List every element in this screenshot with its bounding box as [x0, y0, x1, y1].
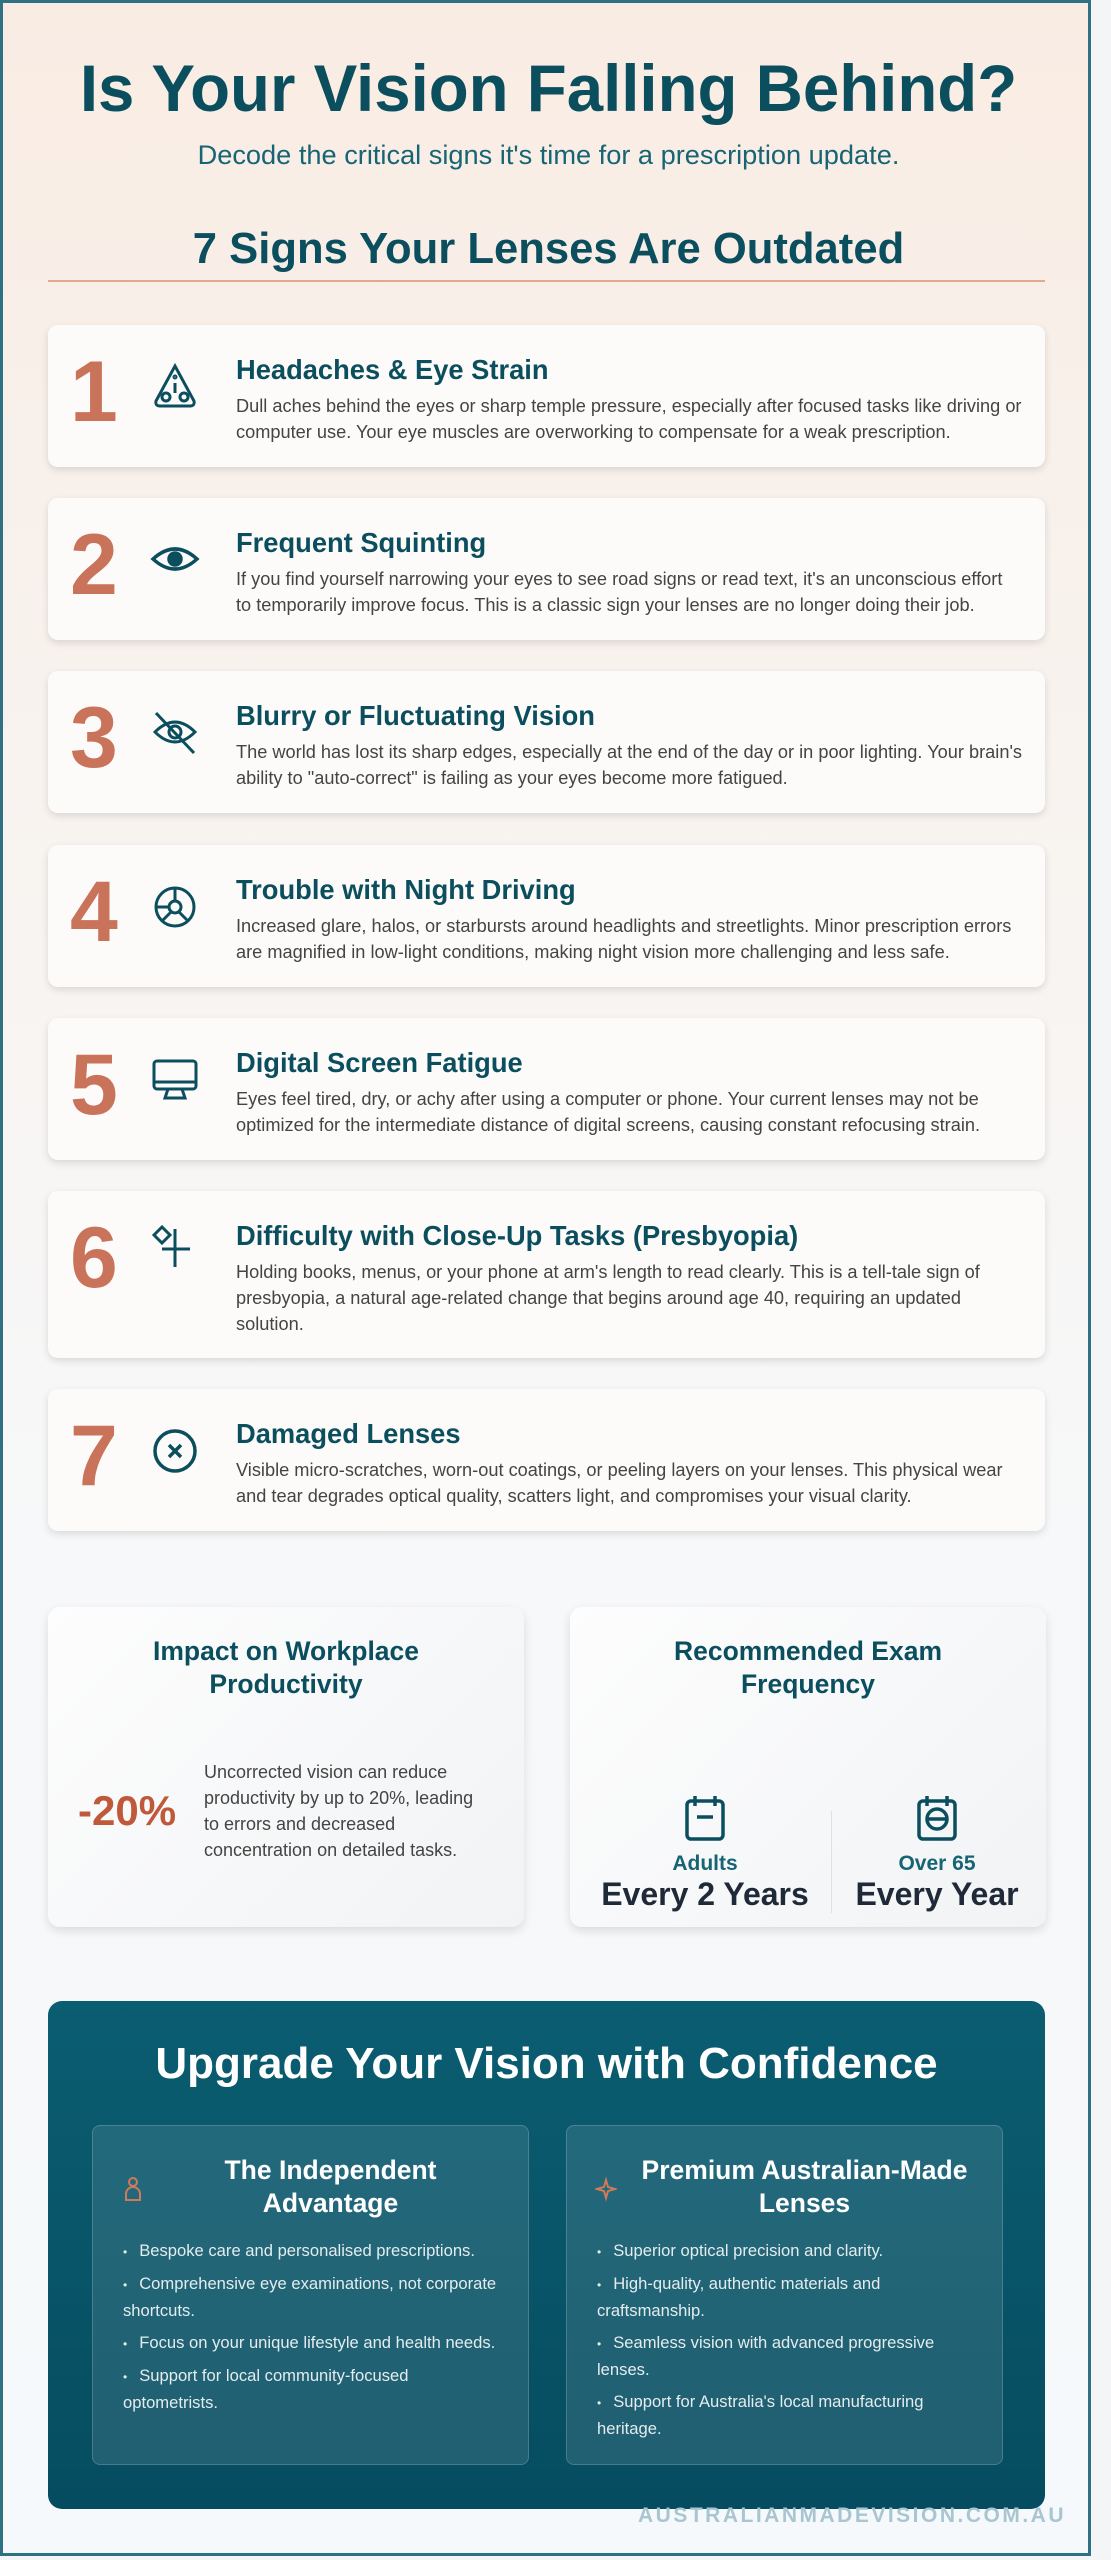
card 7: 7	[70, 1408, 118, 1504]
icon: monitor	[152, 1060, 198, 1100]
card 2: Frequent Squinting	[236, 527, 486, 558]
card: australian made: Support for Australia's local manufacturing heritage.	[597, 2392, 924, 2438]
over 65 column: Every Year	[855, 1876, 1019, 1912]
footer url: AUSTRALIANMADEVISION.COM.AU	[638, 2504, 1066, 2527]
card 6	[48, 1191, 1045, 1358]
panel: upgrade	[48, 2001, 1045, 2509]
card: australian made: Premium Australian-Made	[642, 2155, 967, 2185]
over 65 column: Over 65	[898, 1852, 976, 1875]
card 3: The world has lost its sharp edges, especially at the end of the day or in poor lighting. Your brain's ability to "auto-correct" is failing as your eyes become more fatigued.	[236, 742, 1022, 788]
card 4	[48, 845, 1045, 987]
card 4: 4	[70, 864, 118, 960]
card 7: Damaged Lenses	[236, 1418, 461, 1449]
section heading: 7 Signs Your Lenses Are Outdated	[193, 225, 904, 273]
panel: productivity: Impact on Workplace	[153, 1636, 419, 1666]
icon: warning head	[154, 363, 196, 408]
subtitle: Decode the critical signs it's time for a prescription update.	[198, 139, 899, 170]
card 5: Digital Screen Fatigue	[236, 1047, 523, 1078]
adults column: Adults	[672, 1852, 738, 1875]
adults column: Every 2 Years	[601, 1876, 809, 1912]
icon: damaged lens	[153, 1429, 197, 1473]
card 4: Increased glare, halos, or starbursts around headlights and streetlights. Minor prescription errors are magnified in low-light conditions, making night vision more challenging and less safe.	[236, 916, 1011, 962]
card 4: Trouble with Night Driving	[236, 874, 576, 905]
card: independent advantage: The Independent	[224, 2155, 436, 2185]
icon: night	[154, 886, 196, 928]
card: independent advantage: Focus on your unique lifestyle and health needs.	[139, 2333, 495, 2352]
panel: exam frequency	[570, 1607, 1046, 1927]
panel: productivity	[48, 1607, 524, 1927]
card 7	[48, 1389, 1045, 1531]
card 3	[48, 671, 1045, 813]
card: australian made: High-quality, authentic materials and craftsmanship.	[597, 2274, 880, 2320]
card 1	[48, 325, 1045, 467]
card 2: If you find yourself narrowing your eyes to see road signs or read text, it's an unconscious effort	[236, 569, 1002, 589]
card 1: 1	[70, 344, 118, 440]
upgrade heading: Upgrade Your Vision with Confidence	[155, 2039, 938, 2088]
icon: close-up	[152, 1225, 190, 1267]
adults column	[601, 1796, 809, 1912]
card 5: 5	[70, 1037, 118, 1133]
stat text: Uncorrected vision can reduce productivity by up to 20%, leading to errors and decreased concentration on detailed tasks.	[204, 1762, 473, 1860]
icon: eye	[150, 547, 200, 571]
card 5: Eyes feel tired, dry, or achy after using a computer or phone. Your current lenses may not be optimized for the intermediate distance of digital screens, causing constant refocusing strain.	[236, 1089, 980, 1135]
card: independent advantage	[92, 2125, 529, 2465]
icon: sparkle	[595, 2176, 617, 2202]
icon: person	[125, 2177, 141, 2201]
over 65 column	[855, 1796, 1019, 1912]
card: australian made: Seamless vision with advanced progressive lenses.	[597, 2333, 934, 2379]
panel: productivity: Productivity	[209, 1669, 363, 1699]
card 2	[48, 498, 1045, 640]
card 6: 6	[70, 1210, 118, 1306]
card 2: 2	[70, 517, 118, 613]
card: australian made: Lenses	[759, 2188, 850, 2218]
card 1: Dull aches behind the eyes or sharp temple pressure, especially after focused tasks like driving or computer use. Your eye muscles are overworking to compensate for a weak prescription.	[236, 396, 1022, 442]
card: australian made: Superior optical precision and clarity.	[613, 2241, 883, 2260]
card 2: to temporarily improve focus. This is a classic sign your lenses are no longer doing their job.	[236, 595, 975, 615]
card 7: Visible micro-scratches, worn-out coatings, or peeling layers on your lenses. This physical wear and tear degrades optical quality, scatters light, and compromises your visual clarity.	[236, 1460, 1003, 1506]
panel: exam frequency: Recommended Exam	[674, 1636, 942, 1666]
title: Is Your Vision Falling Behind?	[80, 52, 1017, 125]
card 3: 3	[70, 690, 118, 786]
card: independent advantage: Comprehensive eye examinations, not corporate shortcuts.	[123, 2274, 496, 2320]
card: independent advantage: Bespoke care and personalised prescriptions.	[139, 2241, 475, 2260]
card: independent advantage: Support for local community-focused optometrists.	[123, 2366, 409, 2412]
card: australian made	[566, 2125, 1003, 2465]
icon: eye off	[153, 712, 197, 754]
card 6: Holding books, menus, or your phone at arm's length to read clearly. This is a tell-tale sign of presbyopia, a natural age-related change that begins around age 40, requiring an updated solution.	[236, 1262, 980, 1334]
card: independent advantage: Advantage	[263, 2188, 398, 2218]
panel: exam frequency: Frequency	[741, 1669, 875, 1699]
card 3: Blurry or Fluctuating Vision	[236, 700, 595, 731]
card 5	[48, 1018, 1045, 1160]
stat: -20%	[78, 1787, 176, 1834]
card 6: Difficulty with Close-Up Tasks (Presbyopia)	[236, 1220, 798, 1251]
card 1: Headaches & Eye Strain	[236, 354, 549, 385]
